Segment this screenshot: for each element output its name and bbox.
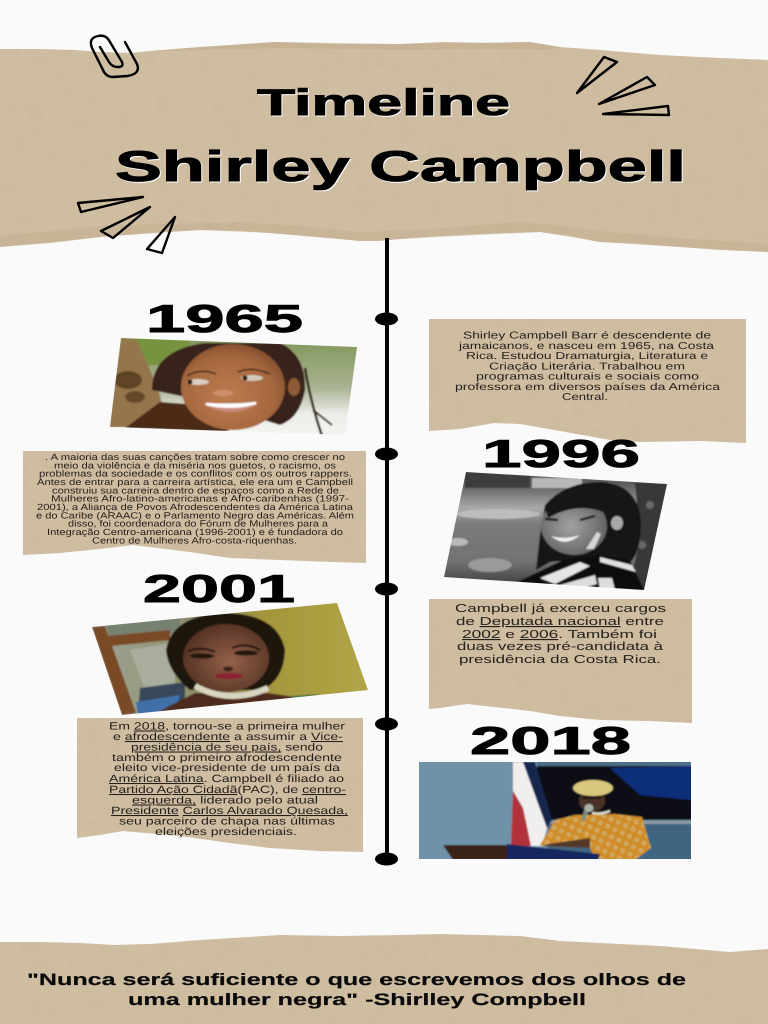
- panel: biography: [429, 319, 746, 443]
- career text: Mulheres Afro-latino-americanas e Afro-caribenhas (1997-: [51, 494, 349, 504]
- biography text: Criação Literária. Trabalhou em: [489, 362, 685, 372]
- vice presidency text: esquerda, liderado pelo atual: [132, 794, 318, 806]
- quote: [27, 971, 686, 1009]
- vice presidency text: seu parceiro de chapa nas últimas: [119, 816, 335, 828]
- biography text: programas culturais e sociais como: [476, 372, 700, 382]
- year 2001: 2001: [143, 568, 295, 611]
- political roles text: 2002 e 2006 . Também foi: [462, 629, 657, 641]
- timeline axis: [375, 238, 398, 866]
- footer paper panel: [0, 934, 768, 1024]
- career text: problemas da sociedade e os conflitos com os outros rappers.: [39, 469, 352, 479]
- biography text: [455, 330, 721, 403]
- vice presidency text: Em 2018 , tornou-se a primeira mulher: [109, 720, 346, 732]
- career text: Integração Centro-americana (1996-2001) e é fundadora do: [47, 527, 343, 537]
- political roles text: [455, 603, 666, 666]
- icon: paperclip: [91, 36, 138, 77]
- biography text: Shirley Campbell Barr é descendente de: [463, 330, 712, 342]
- career text: . A maioria das suas canções tratam sobre como crescer no: [45, 452, 345, 462]
- career text: e do Caribe (ARAAC) e o Parlamento Negro das Américas. Além: [36, 510, 354, 520]
- title: Shirley Campbell: [115, 143, 686, 191]
- vice presidency text: eleito vice-presidente de um país da: [114, 762, 340, 774]
- vice presidency text: também o primeiro afrodescendente: [112, 752, 342, 764]
- icon: spark lines bottom left: [78, 197, 175, 253]
- career text: 2001), a Aliança de Povos Afrodescendentes da América Latina: [37, 502, 353, 512]
- vice presidency text: Presidente Carlos Alvarado Quesada,: [111, 805, 348, 817]
- photo 1996: [440, 468, 672, 593]
- political roles text: duas vezes pré-candidata à: [457, 641, 664, 653]
- panel: career: [23, 451, 366, 563]
- title: [115, 82, 686, 191]
- vice presidency text: América Latina . Campbell é filiado ao: [109, 773, 344, 785]
- career text: Antes de entrar para a carreira artística, ele era um e Campbell: [37, 477, 353, 487]
- career text: meio da violência e da miséria nos guetos, o racismo, os: [54, 460, 337, 470]
- header paper panel: [0, 42, 768, 252]
- biography text: Rica. Estudou Dramaturgia, Literatura e: [466, 351, 709, 362]
- political roles text: presidência da Costa Rica.: [459, 654, 661, 666]
- vice presidency text: eleições presidenciais.: [155, 826, 297, 838]
- quote: "Nunca será suficiente o que escrevemos dos olhos de: [27, 971, 686, 989]
- biography text: professora em diversos países da América: [455, 382, 721, 393]
- vice presidency text: [109, 720, 348, 838]
- career text: Centro de Mulheres Afro-costa-riquenhas.: [92, 535, 297, 545]
- career text: construiu sua carreira dentro de espaços como a Rede de: [52, 485, 339, 495]
- year 2018: 2018: [470, 720, 631, 763]
- political roles text: de Deputada nacional entre: [456, 616, 664, 628]
- career text: [36, 452, 354, 545]
- career text: disso, foi coordenadora do Fórum de Mulheres para a: [68, 519, 328, 529]
- biography text: Central.: [562, 392, 608, 403]
- year 1965: 1965: [146, 298, 303, 341]
- photo 2001: [88, 600, 372, 718]
- title: Timeline: [257, 82, 510, 123]
- panel: vice presidency: [77, 718, 363, 852]
- quote: uma mulher negra" -Shirlley Compbell: [128, 991, 586, 1009]
- icon: spark lines top right: [577, 57, 669, 115]
- political roles text: Campbell já exerceu cargos: [455, 603, 666, 615]
- vice presidency text: Partido Ação Cidadã (PAC), de centro-: [109, 784, 347, 796]
- panel: political roles: [429, 599, 692, 723]
- biography text: jamaicanos, e nasceu em 1965, na Costa: [458, 341, 715, 352]
- photo 2018: [419, 762, 691, 859]
- photo 1965: [110, 338, 357, 435]
- year 1996: 1996: [482, 433, 640, 476]
- vice presidency text: presidência de seu país, sendo: [131, 742, 323, 754]
- vice presidency text: e afrodescendente a assumir a Vice-: [113, 731, 344, 743]
